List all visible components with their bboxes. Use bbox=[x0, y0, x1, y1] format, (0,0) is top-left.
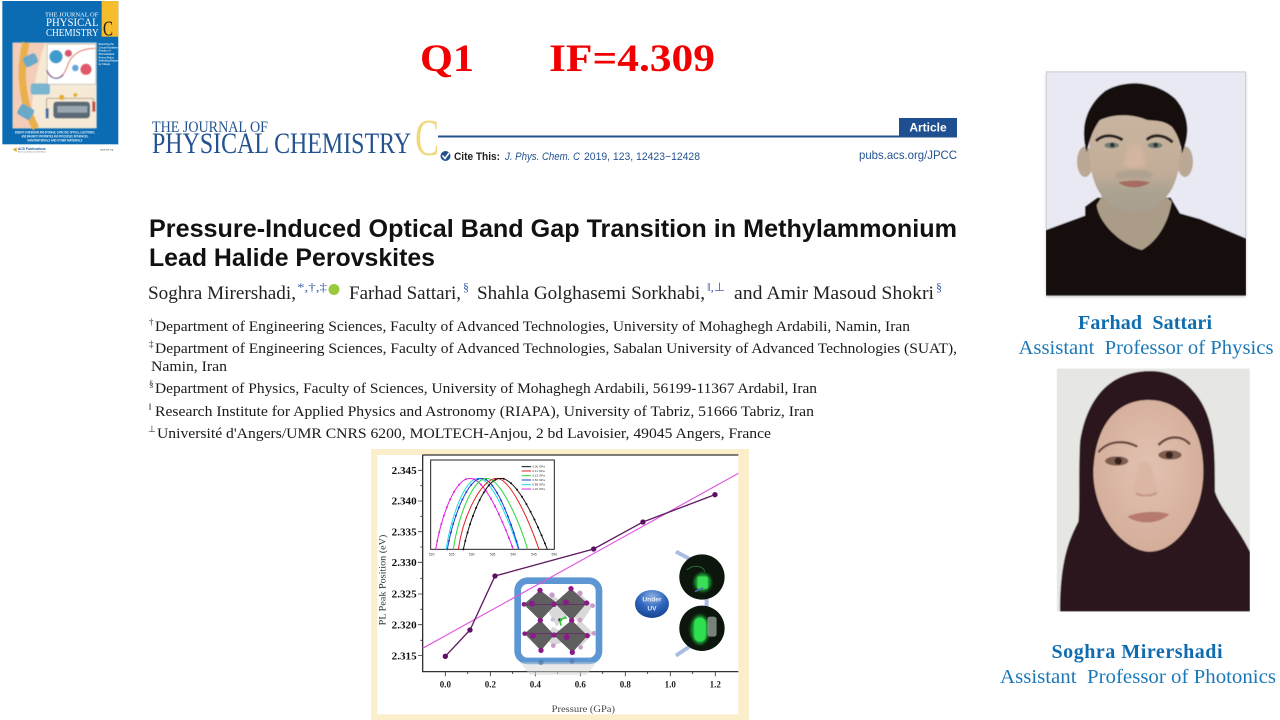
chart: x-axis tick labels bbox=[440, 680, 721, 690]
chart: x-axis tick labels: 0.2 bbox=[485, 680, 496, 690]
chart: x-axis tick labels: 0.4 bbox=[530, 680, 541, 690]
cover: side and footer captions: by Charge bbox=[99, 64, 111, 66]
cover: side and footer captions: Crucial Oxidation bbox=[99, 46, 119, 49]
author list: § bbox=[463, 280, 469, 294]
cover: masthead: PHYSICAL bbox=[46, 17, 99, 29]
chart: Under UV badge: UV bbox=[647, 606, 657, 613]
chart: perovskite crystal structure icon bbox=[518, 581, 599, 675]
chart: x-axis tick labels: 1.0 bbox=[665, 680, 676, 690]
chart: UV vials connector bbox=[676, 552, 707, 656]
chart: linear fit line bbox=[423, 473, 738, 648]
heading: Q1 and impact factor: IF=4.309 bbox=[549, 37, 715, 80]
chart: y-axis tick labels: 2.320 bbox=[392, 620, 417, 631]
caption: Farhad Sattari bbox=[1018, 312, 1274, 359]
cover: side and footer captions: Reporting the bbox=[99, 43, 114, 46]
inset: legend: 0.66 GPa bbox=[532, 478, 545, 482]
masthead: citation bbox=[440, 151, 700, 163]
chart: cream frame bbox=[371, 449, 749, 720]
author affiliations: Department of Engineering Sciences, Faculty of Advanced Technologies, Sabalan University of Advanced Technologies (SUAT), bbox=[155, 341, 957, 357]
cover: side and footer captions: AND MAGNETIC PROPERTIES AND PROCESSES; INTERFACES, bbox=[22, 134, 88, 138]
chart: luminescent vial photo, top bbox=[679, 554, 725, 600]
masthead: yellow C: C bbox=[415, 110, 439, 167]
article title: Lead Halide Perovskites bbox=[149, 244, 435, 272]
chart: x-axis tick labels: 0.8 bbox=[620, 680, 631, 690]
inset: legend: 0.22 GPa bbox=[532, 474, 545, 478]
author list: § bbox=[936, 280, 942, 294]
inset: axis labels: 540 bbox=[511, 552, 516, 556]
chart: x-axis title: Pressure (GPa) bbox=[552, 704, 615, 715]
cover: ACS Publications logo bbox=[13, 147, 114, 154]
cover: side and footer captions: Photoinitiated bbox=[99, 53, 115, 56]
author affiliations: ‡ bbox=[149, 339, 154, 349]
author list: ‖,⊥ bbox=[707, 280, 725, 294]
caption: Farhad Sattari: Assistant Professor of Physics bbox=[1018, 337, 1274, 359]
caption: Soghra Mirershadi bbox=[1000, 641, 1276, 688]
inset: axis labels: 520 bbox=[429, 552, 435, 556]
masthead: citation: Cite This: bbox=[454, 151, 500, 163]
chart: Under UV badge: Under bbox=[642, 597, 662, 604]
masthead: article tag bbox=[899, 118, 957, 136]
masthead: journal URL: pubs.acs.org/JPCC bbox=[859, 148, 957, 162]
inset: spectra markers bbox=[436, 478, 547, 549]
chart: y-axis tick labels: 2.325 bbox=[392, 590, 417, 601]
cover: ACS Publications logo: ACS Publications bbox=[18, 147, 46, 151]
cover: yellow C tab bbox=[102, 1, 118, 40]
portrait: Farhad Sattari bbox=[1046, 72, 1246, 296]
chart: y-axis title: PL Peak Position (eV) bbox=[377, 535, 388, 625]
chart: axes bbox=[418, 455, 738, 676]
author affiliations: § bbox=[149, 379, 154, 389]
portrait: Soghra Mirershadi bbox=[1057, 368, 1250, 612]
chart: y-axis tick labels: 2.315 bbox=[392, 651, 417, 662]
chart: y-axis tick labels: 2.330 bbox=[392, 558, 417, 569]
caption: Farhad Sattari: Farhad Sattari bbox=[1078, 312, 1212, 334]
cover: ACS Publications logo: Most Trusted. Most Cited. Most Read. bbox=[18, 151, 46, 154]
heading: Q1 and impact factor bbox=[420, 37, 715, 80]
line chart: PL peak position vs pressure bbox=[371, 449, 749, 720]
author list: Soghra Mirershadi, bbox=[148, 283, 296, 304]
article title bbox=[149, 215, 957, 272]
masthead: rule bbox=[438, 136, 957, 138]
chart: x-axis tick labels: 0.0 bbox=[440, 680, 451, 690]
journal masthead bbox=[152, 110, 957, 167]
author affiliations: Université d'Angers/UMR CNRS 6200, MOLTECH-Anjou, 2 bd Lavoisier, 49045 Angers, France bbox=[157, 426, 771, 442]
chart: y-axis tick labels: 2.345 bbox=[392, 466, 417, 477]
author affiliations: † bbox=[149, 317, 154, 327]
article title: Pressure-Induced Optical Band Gap Transition in Methylammonium bbox=[149, 215, 957, 243]
cover: ACS Publications logo: www.acs.org bbox=[100, 149, 114, 152]
cover: masthead: CHEMISTRY bbox=[46, 28, 99, 39]
masthead: citation: J. Phys. Chem. C bbox=[504, 151, 580, 163]
masthead: journal name: THE JOURNAL OF bbox=[152, 119, 268, 136]
cover: side and footer captions: Kinetics of bbox=[99, 50, 111, 53]
caption: Soghra Mirershadi: Soghra Mirershadi bbox=[1052, 641, 1223, 663]
masthead: citation: 2019, 123, 12423−12428 bbox=[584, 151, 700, 163]
chart: PL spectra inset bbox=[429, 460, 557, 556]
inset: axis labels: 530 bbox=[469, 552, 475, 556]
cover: side and footer captions: Switching Relayed bbox=[99, 60, 120, 63]
masthead: journal name bbox=[152, 119, 411, 160]
inset: axis labels bbox=[429, 552, 557, 556]
chart: y-axis tick labels: 2.335 bbox=[392, 527, 417, 538]
author affiliations bbox=[148, 317, 957, 442]
chart: y-axis tick labels: 2.340 bbox=[392, 497, 417, 508]
chart: Under UV badge bbox=[635, 590, 669, 618]
inset: legend: 1.20 GPa bbox=[532, 487, 545, 491]
author affiliations: Department of Engineering Sciences, Faculty of Advanced Technologies, University of Mohaghegh Ardabili, Namin, Iran bbox=[155, 319, 911, 335]
journal cover thumbnail bbox=[2, 1, 120, 154]
author affiliations: Research Institute for Applied Physics and Astronomy (RIAPA), University of Tabriz, 51666 Tabriz, Iran bbox=[155, 404, 815, 420]
inset: axis labels: 550 bbox=[552, 552, 557, 556]
chart: x-axis tick labels: 0.6 bbox=[575, 680, 586, 690]
inset: legend: 0.11 GPa bbox=[532, 469, 545, 473]
author affiliations: Namin, Iran bbox=[151, 359, 228, 375]
cover: side and footer captions bbox=[15, 43, 120, 142]
cover: side and footer captions: Proton Redox bbox=[99, 56, 115, 59]
masthead: article tag: Article bbox=[909, 120, 947, 134]
author list: Shahla Golghasemi Sorkhabi, bbox=[477, 283, 705, 304]
inset: legend bbox=[522, 465, 545, 491]
cover: side and footer captions: ENERGY CONVERSION AND STORAGE; CATALYSIS; OPTICAL, ELECTRONIC, bbox=[15, 130, 95, 134]
author affiliations: Department of Physics, Faculty of Sciences, University of Mohaghegh Ardabili, 56199-11367 Ardabil, Iran bbox=[155, 381, 818, 397]
inset: axis labels: 535 bbox=[490, 552, 496, 556]
inset: axis labels: 545 bbox=[531, 552, 537, 556]
cover: artwork panel bbox=[13, 43, 97, 128]
icon: ORCID badge bbox=[328, 284, 340, 295]
cover: masthead: THE JOURNAL OF bbox=[45, 13, 99, 19]
cover: yellow C tab: C bbox=[103, 18, 113, 40]
chart: y-axis tick labels bbox=[392, 466, 417, 662]
chart: x-axis tick labels: 1.2 bbox=[710, 680, 721, 690]
masthead: journal name: PHYSICAL CHEMISTRY bbox=[152, 127, 411, 160]
inset: axis labels: 525 bbox=[449, 552, 455, 556]
author affiliations: ‖ bbox=[149, 402, 152, 412]
heading: Q1 and impact factor: Q1 bbox=[420, 37, 474, 80]
inset: legend: 0.88 GPa bbox=[532, 483, 545, 487]
chart: data series bbox=[443, 492, 718, 659]
author list: *,†,‡ bbox=[297, 280, 327, 294]
author list: Farhad Sattari, bbox=[349, 283, 461, 304]
caption: Soghra Mirershadi: Assistant Professor of Photonics bbox=[1000, 666, 1276, 688]
author affiliations: ⊥ bbox=[148, 424, 156, 434]
author list bbox=[148, 280, 942, 304]
cover: masthead bbox=[45, 13, 99, 39]
inset: legend: 0.00 GPa bbox=[532, 465, 545, 469]
cover: side and footer captions: NANOMATERIALS AND OTHER MATERIALS bbox=[27, 138, 83, 142]
author list: and Amir Masoud Shokri bbox=[734, 283, 934, 304]
inset: spectra curves bbox=[436, 478, 547, 549]
chart: luminescent vial photo, bottom bbox=[679, 606, 725, 651]
